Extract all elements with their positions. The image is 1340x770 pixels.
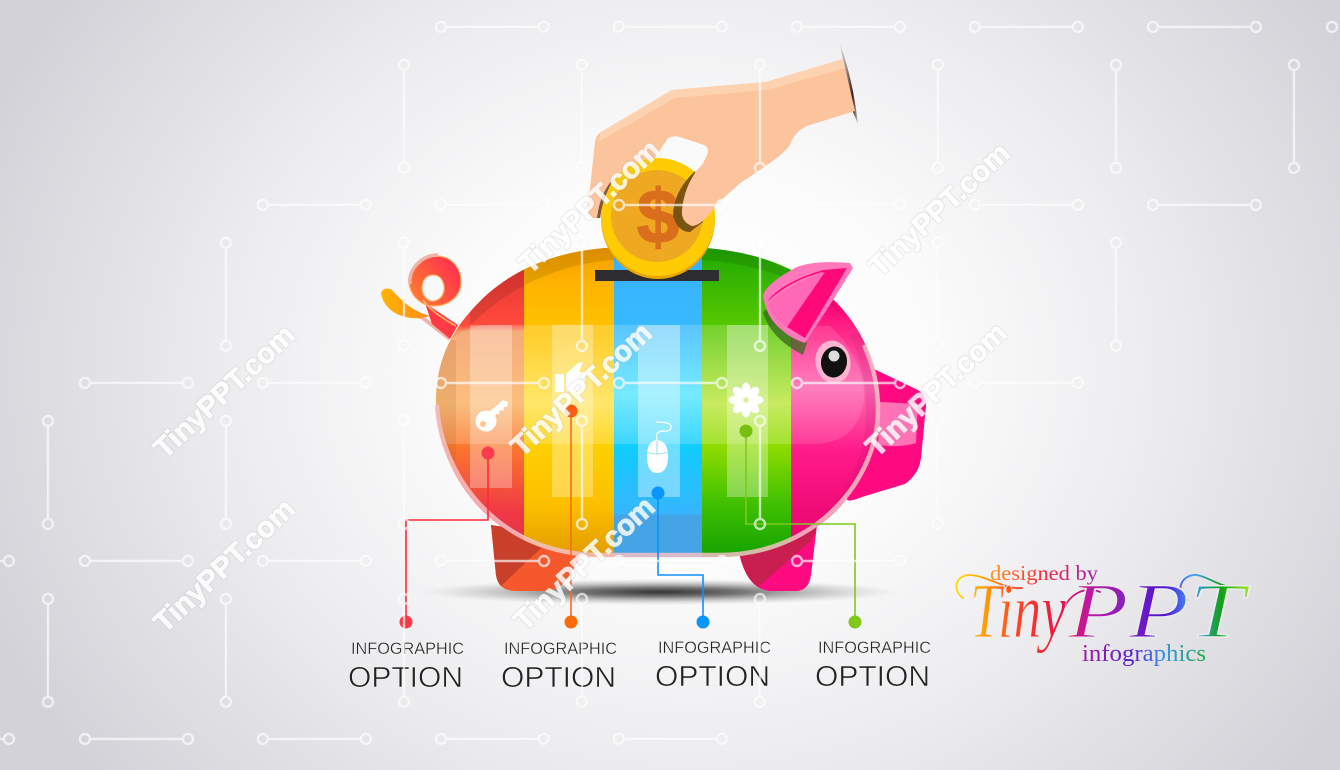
logo: designed by TinyPPT infographics: Tiny: [970, 567, 1066, 654]
hand highlight: [598, 59, 845, 142]
watermarks: TinyPPT.com: [148, 319, 301, 465]
option label 3: OPTION: [655, 661, 770, 693]
hand back fingers: [587, 59, 855, 218]
watermarks: TinyPPT.com: [863, 137, 1016, 283]
watermarks: [148, 134, 1016, 639]
watermarks: TinyPPT.com: [860, 317, 1013, 463]
watermarks: TinyPPT.com: [508, 491, 661, 637]
option label 2: [501, 640, 617, 694]
ear shadow: [763, 290, 807, 355]
ground shadow: [420, 579, 900, 605]
snout highlight: [878, 402, 918, 446]
icon: key: [476, 400, 508, 432]
finger shadow: [597, 177, 615, 218]
watermarks: TinyPPT.com: [148, 493, 301, 639]
logo: designed by TinyPPT infographics: designed by: [990, 561, 1099, 585]
logo: designed by TinyPPT infographics: [956, 561, 1250, 667]
logo: designed by TinyPPT infographics: PPT: [1067, 567, 1250, 654]
right leg shade: [738, 525, 817, 587]
blue connector: [652, 486, 710, 628]
option lines and dots: [400, 404, 862, 628]
option label 4: INFOGRAPHIC: [818, 639, 931, 657]
hand cuff: [840, 44, 858, 124]
option label 1: OPTION: [348, 662, 463, 694]
logo: designed by TinyPPT infographics: infographics: [1082, 641, 1206, 667]
icon: piggy bank: [381, 240, 926, 591]
pig eye: [812, 338, 854, 386]
option label 1: [348, 640, 464, 694]
watermarks: TinyPPT.com: [505, 317, 658, 463]
pig tail: [381, 255, 461, 339]
dollar sign: $: [637, 175, 679, 260]
icon: thumbs up: [555, 362, 585, 392]
ear dark band: [767, 268, 847, 338]
pig snout: [847, 368, 926, 501]
red connector: [400, 446, 494, 628]
option label 3: INFOGRAPHIC: [658, 639, 771, 657]
gold coin: [601, 158, 715, 279]
right leg: [738, 525, 817, 591]
option label 4: [815, 639, 931, 693]
option label 2: INFOGRAPHIC: [504, 640, 617, 658]
option label 1: INFOGRAPHIC: [351, 640, 464, 658]
green connector: [740, 424, 862, 628]
icon: flower: [728, 382, 764, 418]
glass rim: [437, 345, 878, 555]
icon: computer mouse: [647, 422, 671, 473]
watermarks: TinyPPT.com: [513, 134, 666, 280]
option label 2: OPTION: [501, 662, 616, 694]
pig body stripes: [430, 240, 886, 565]
pig ear: [763, 262, 853, 343]
coin slot: [595, 270, 719, 281]
left leg shade: [491, 525, 555, 586]
orange connector: [564, 404, 578, 628]
option label 3: [655, 639, 771, 693]
option label 4: OPTION: [815, 661, 930, 693]
hand thumb: [673, 150, 760, 232]
ear inner: [768, 272, 825, 327]
left leg: [491, 525, 590, 591]
